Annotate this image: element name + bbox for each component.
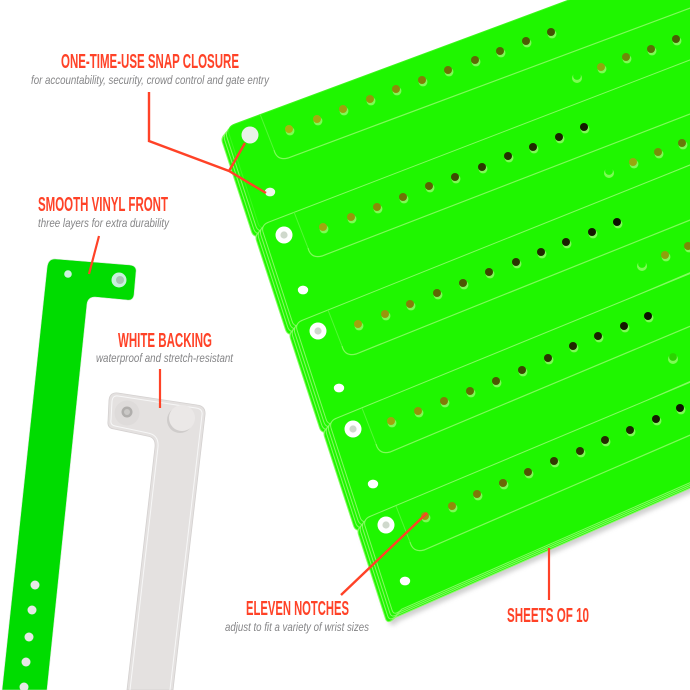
callout: eleven notches: [225, 513, 427, 634]
snap band 2: [276, 226, 292, 244]
green single wristband, front: [2, 259, 136, 690]
stud band 5: [400, 577, 410, 585]
leader lines: [149, 92, 266, 193]
holes: band 1: [285, 28, 556, 135]
wristband 3: [290, 137, 690, 432]
leader line: [159, 369, 161, 408]
wristband 1: [222, 0, 690, 236]
heading: WHITE BACKING: [118, 329, 212, 352]
callout: white backing: [96, 329, 234, 408]
snap band 3: [310, 322, 326, 340]
heading: SMOOTH VINYL FRONT: [38, 193, 168, 216]
snap: [112, 272, 126, 288]
wristband 4: [324, 245, 690, 530]
subtext: waterproof and stretch-resistant: [96, 351, 234, 365]
callout: sheets of 10: [507, 548, 589, 627]
holes: band 5: [421, 404, 685, 522]
shadow: [362, 365, 690, 625]
snap socket: [114, 400, 140, 426]
snap band 5: [378, 516, 394, 534]
wristband 5: [358, 353, 690, 622]
wristband 2: [256, 33, 690, 334]
subtext: adjust to fit a variety of wrist sizes: [225, 620, 369, 634]
snap stud: [167, 405, 195, 433]
heading: ONE-TIME-USE SNAP CLOSURE: [61, 50, 239, 73]
heading: SHEETS OF 10: [507, 604, 589, 627]
leader line: [89, 236, 99, 274]
holes: band 2: [319, 123, 589, 233]
holes: band 3: [354, 218, 622, 330]
snap band 1: [242, 126, 258, 144]
leader line: [341, 513, 427, 595]
sheet of green wristbands: [222, 0, 690, 625]
snap band 4: [344, 420, 362, 438]
stud band 2: [298, 286, 308, 294]
stud band 4: [368, 480, 378, 488]
callout: one-time-use snap closure: [31, 50, 270, 193]
stud band 1: [265, 188, 275, 196]
notches: [20, 580, 40, 690]
leader line: [548, 548, 550, 600]
white single wristband, back: [108, 393, 205, 690]
stud: [64, 270, 72, 278]
callout: smooth vinyl front: [38, 193, 170, 274]
subtext: three layers for extra durability: [38, 216, 170, 230]
stud band 3: [334, 384, 344, 392]
tail holes rows: [572, 35, 690, 364]
subtext: for accountability, security, crowd control and gate entry: [31, 73, 270, 87]
heading: ELEVEN NOTCHES: [246, 597, 349, 620]
holes: band 4: [387, 312, 653, 427]
